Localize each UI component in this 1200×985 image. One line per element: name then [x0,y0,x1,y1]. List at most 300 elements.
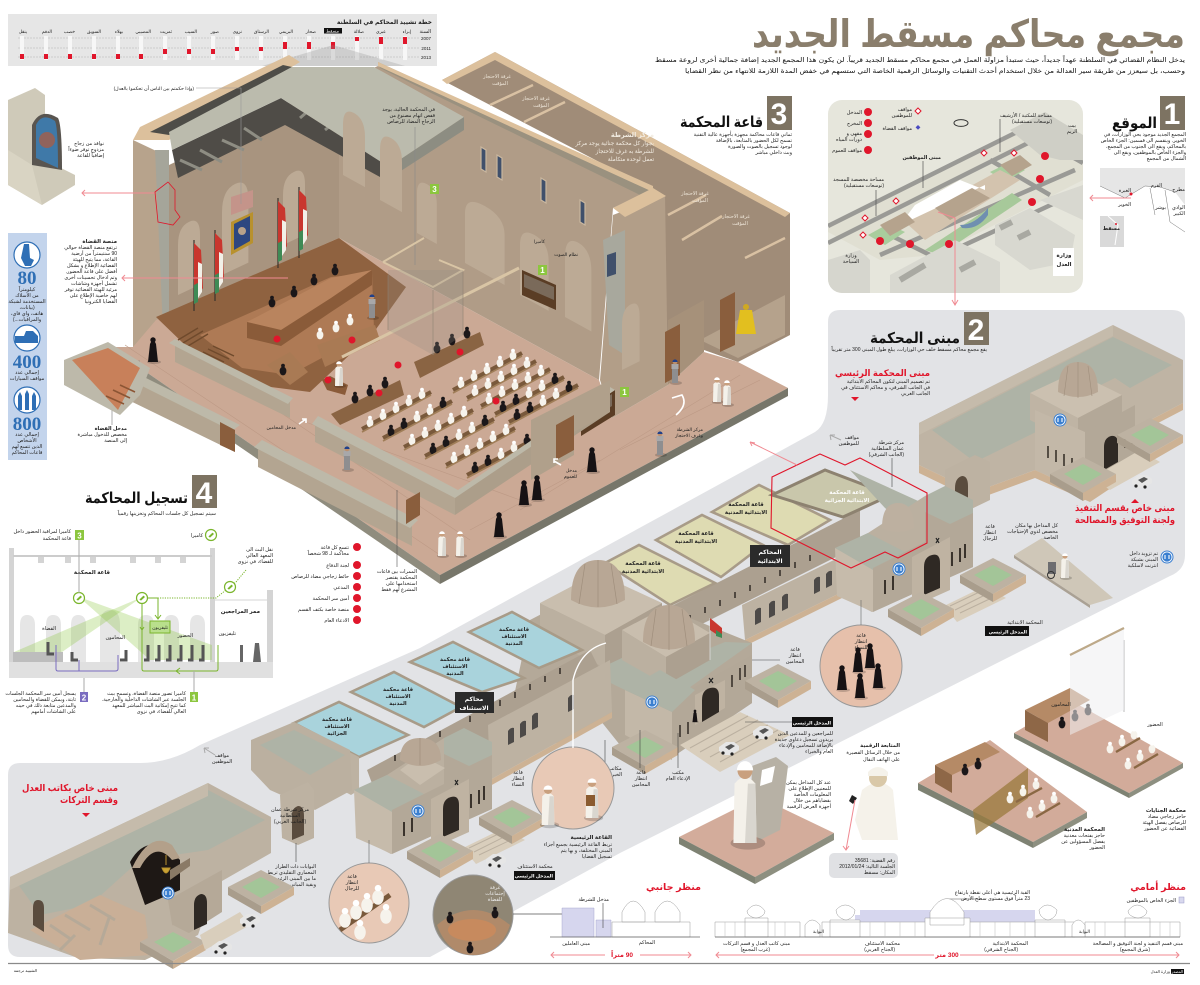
chart: courts construction plan: 2011 [421,46,431,51]
elevation: front view: مبنى كاتب العدل و قسم التركات [723,941,790,947]
label: parking and police: مركز شرطة [878,440,904,446]
arrow: map to building [938,212,958,305]
section 1: location: والجزء الخاص بالموظفين، ويقع الى [1114,150,1187,156]
section 3: courtroom heading: قاعة المحكمة [680,114,763,131]
flags [194,187,308,311]
side block [294,723,359,795]
panel: aerial site map: للموظفين [892,113,912,119]
panel: sidebar statistics [8,233,47,460]
chart: courts construction plan: السيب [185,29,197,34]
east block labels: للرجال [983,536,998,542]
dark tag: primary courts [750,545,790,567]
panel: sidebar statistics: والمراقبات...) [13,317,42,323]
label: main entrance: مكاتب [608,766,622,772]
tower [1030,372,1122,418]
labels: appeals block: محكمة الاستئناف [517,864,553,870]
legend: numbered courtroom elements: منصة خاصة بكتف القسم [298,607,349,613]
panel: sidebar statistics: 400 [13,352,41,373]
diagram: trial recording section [5,529,273,715]
seated figures [48,642,203,660]
callout: judges bench: القاعة، مما يتيح للهيئة [73,257,117,263]
red highlight [771,454,927,568]
appeals wing: الجزائية [327,731,347,737]
outer wall [133,140,169,347]
panel: aerial site map: السياحة [843,259,859,265]
dark tag: appeal courts: محاكم [465,696,484,703]
circle: women waiting hall [820,600,902,707]
label: main entrance: مكتب [672,770,684,776]
appeals wing: قاعة محكمة [383,687,413,693]
hall roofs [294,612,582,757]
appeals wing: الاستئناف [324,724,350,730]
kiosk note: للمعنيين الإطلاع على [788,786,831,792]
primary court wing: الابتدائية المدنية [622,569,664,575]
inset locator map: الوادي [1172,205,1185,211]
dome base 2 [622,607,710,657]
note: wireless internet [1128,551,1173,569]
panel: aerial site map: مقهى و [846,131,862,137]
judges entrance stairs [64,342,150,415]
chart: courts construction plan: المضيبي [135,29,151,34]
red number markers [274,336,500,404]
callout: judges bench: وتم ادخال تحسينات أخرى [64,274,118,281]
elevation: front view: منظر أمامي [1130,880,1186,893]
sms info card: رقم القضية: 35681 [855,858,896,864]
inset locator map: الغبرة [1119,188,1131,194]
outer wall [919,325,1183,495]
courtroom cutaway [110,55,788,584]
labels: appeals block: النساء [512,782,524,788]
trial vignette: criminal court: الحضور [1146,722,1163,728]
section 1: location: المجمع الجديد موجود بحي الوزارات، في [1104,132,1186,138]
inset locator map: بوشر [1154,205,1166,211]
elevation: front view: مبنى قسم التنفيذ و لجنة التوفيق و المصالحة [1093,941,1183,947]
label: main entrance: قاعة [636,770,646,776]
colonnade [742,558,842,640]
steps and ponds [680,712,790,772]
labels: appeals block: السلطانية [280,813,300,819]
callout: judges bench: تشمل أجهزة وشاشات [71,280,118,287]
callout: corridors: المشرع لهم فقط [381,587,417,593]
callout: corridors [377,490,417,593]
panel: aerial site map: (توسعات مستقبلية) [1012,119,1052,125]
holding rooms behind the courtroom: غرفة الاحتجاز [721,214,750,220]
elevation: front view [715,880,1186,959]
panel: aerial site map: مواقف للعموم [832,148,862,154]
dome base [540,573,662,635]
right interior wall [285,66,653,380]
elevation: side view: المحاكم [639,940,655,946]
holding rooms behind the courtroom: المؤقت [492,81,508,87]
gate [280,782,314,845]
dome [400,755,445,785]
panel: sidebar statistics: من الأسلاك [15,292,39,299]
dark tag: appeal courts [455,692,494,713]
label: main entrance: الإدعاء العام [666,776,690,782]
tag 1: كما تتيح إمكانية البث المباشر للمعهد [112,703,187,709]
east block labels: ولجنة التوفيق والمصالحة [1075,515,1175,526]
label: main entrance: الخبراء [608,772,622,778]
labels: appeals block: مركز شرطة عمان [271,807,309,813]
callout: corridors: الممرات بين قاعات [377,569,417,575]
labels: appeals block: مواقف [215,753,229,759]
labels: appeals block: المعماري التقليدي تربط [267,870,316,876]
legend: numbered courtroom elements: محاكمة لـ 98 شخصاً [307,549,349,557]
hall roofs [605,470,891,605]
primary court wing: قاعة المحكمة [728,501,764,508]
chart: courts construction plan: إبراء [403,29,411,35]
label: main entrance: انتظار [788,653,801,659]
callout: window detail [8,88,180,225]
holding rooms behind the courtroom: المؤقت [732,221,748,227]
section 4: trial recording heading: 4 [196,477,213,510]
man with phone: من خلال الرسائل القصيرة [846,750,900,756]
east block labels: انتظار [983,530,996,536]
callout: judges bench: مرئية للهيئة القضائية توفر [64,287,117,293]
panel: sidebar statistics: الذين تتسع لهم [12,444,42,450]
criminal hall label: قاعة المحكمة [829,489,865,496]
police center note: للشرطة به غرف للاحتجاز [595,149,654,155]
chart: courts construction plan: مسقط [326,29,340,34]
section 1: location: بالمحاكم، ويقع الى الجنوب من المجمع، [1106,144,1186,150]
entrance faces [1035,410,1085,492]
legend: numbered courtroom elements: حائط زجاجي مضاد للرصاص [291,574,349,580]
people on the floor [147,294,734,558]
diagram: trial recording section: ممر المراجعين [221,609,260,615]
chart: courts construction plan: صور [210,29,219,34]
dark tag: appeal courts: الاستئناف [460,705,488,712]
label: main entrance: العام والخبراء [805,749,833,755]
criminal hall label [825,489,869,504]
accessibility ramp: الخاصة [1043,535,1058,541]
diagram: trial recording section: الحضور [177,633,193,639]
trial vignette: criminal court: محكمة الجنايات [1146,807,1186,814]
section 3: courtroom heading: لوجود تسجيل بالصوت والصورة [728,144,792,150]
section 2: court building heading: تم تصميم المبنى لتكون المحاكم الابتدائية [847,379,931,385]
circle: women waiting hall: انتظار [854,639,867,645]
diagram: trial recording section: كاميرا [191,533,204,539]
legend: numbered courtroom elements: المدعي [333,585,349,591]
primary court wing: الابتدائية المدنية [675,539,717,545]
kiosk note: المعلومات الخاصة [794,792,831,798]
entrance wall [625,655,752,758]
elevation: front view: البوابة [813,929,824,934]
east block labels [983,499,1175,542]
kiosk note: أجهزة العرض الرقمية [787,803,832,810]
trial vignette: civil court: المحكمة المدنية [1064,826,1105,833]
legend: numbered courtroom elements: تتسع كل قاعة [320,545,350,551]
panel: aerial site map: مواقف القضاة [882,126,912,132]
portrait [231,190,253,255]
circle: main hall: تسجيل القضايا [582,854,613,860]
police center note: تعمل لوحدة متكاملة [608,156,654,163]
labels: appeals block: انتظار [511,776,524,782]
section 3: courtroom heading [680,96,793,156]
panel: aerial site map: وزارة [1057,253,1072,259]
section 3: courtroom heading: ثماني قاعات محاكمة مجهزة بأجهزة عالية التقنية [694,130,793,138]
callout: judges entrance: مخصص للدخول مباشرة [77,432,127,438]
panel: aerial site map: (توسعات مستقبلية) [844,183,884,189]
intro text: يدخل النظام القضائي في السلطنة عهداً جديداً، حيث ستبدأ مزاولة العمل في مجمع محاكم مسقط الجديد قريباً. لن يكون هذا المجمع الجديد إضافة جمالية أخرى لروعة مسقط [655,55,1185,64]
section 2: court building heading: مبنى المحكمة الرئيسي [835,368,930,379]
legend: numbered courtroom elements: لجنة الدفاع [326,563,349,569]
section 1: location: الموقع [1112,115,1157,132]
diagram: trial recording section: القضاة [42,626,56,632]
elevation: side view: مبنى العاملين [562,941,590,947]
elevation: front view: البوابة [1079,929,1090,934]
diagram: trial recording section: للقضاء، في نزوى [238,559,273,565]
appeals wing: الاستئناف [501,634,527,640]
label: parking and police: مواقف [845,435,859,441]
dome [1058,362,1098,397]
holding rooms behind the courtroom: غرفة الاحتجاز [521,96,550,102]
diagram: trial recording section: تليفزيون [152,625,169,630]
circle: men waiting hall: انتظار [345,880,358,886]
west block heading: مبنى خاص بكاتب العدل [22,783,118,794]
circle: men waiting hall: قاعة [347,874,357,880]
panel: aerial site map: مبنى الموظفين [902,155,941,161]
holding room labels: غرفة الاحتجاز [482,74,511,80]
labels: appeals block: (الجانب الغربي) [274,819,306,825]
section 2: court building heading [831,312,989,401]
sms info card [829,853,898,878]
chart: courts construction plan: السويق [87,29,101,34]
appeals wing: الاستئناف [442,664,468,670]
intro text: وحسب، بل سيعزز من طريقة سير العدالة من خلال استخدام أحدث التقنيات والوسائل الرقمية الخاصة التي ستسهم في خفض المدة اللازمة للانتهاء من نظر القضايا [685,66,1185,75]
label: main entrance: المدخل الرئيسي [793,720,831,726]
building section [9,662,273,678]
section 3: courtroom heading: 3 [771,98,787,131]
chart: courts construction plan: 2013 [421,55,431,60]
kiosk note: عند كل المداخل يمكن [786,780,831,786]
labels: appeals block: ما بين المبنى الرئيسي [271,876,316,882]
section 3: courtroom heading: وبث داخلي مباشر [754,150,793,156]
circle: main hall [532,643,614,860]
callout: justice verse [114,85,241,204]
callout: judges entrance: مدخل القضاة [95,426,127,432]
appeals wing [251,612,612,878]
trial vignette: civil court: الحضور [1089,845,1105,851]
map labels: بيت [1068,123,1076,129]
circle: judges meeting room: غرفة [490,885,501,891]
label: primary main entrance [985,620,1043,636]
panel: aerial site map: الريم [1067,129,1077,135]
courtroom cutaway: مدخل [566,468,578,473]
callout: window detail: مزدوج توفر ضوءاً [68,145,104,153]
roof [932,337,1172,462]
tag 2: 2 [82,694,87,702]
man with phone: على الهاتف النقال [863,757,900,763]
primary court wing: الابتدائية المدنية [725,510,767,516]
dome 2 [643,605,695,650]
chart: courts construction plan: بهلاء [115,29,123,34]
panel: sidebar statistics: إجمالي عدد [15,370,40,376]
label: main entrance: انتظار [634,776,647,782]
icon: network cable [14,242,40,268]
broadcast note: نقل البث الى [246,547,273,553]
labels: appeals block: البوابات ذات الطراز [274,864,316,870]
trial vignette: criminal court: المحامون [1051,702,1071,708]
ceiling structure [172,98,389,178]
trial vignette: criminal court: حاجز زجاجي مضاد [1148,814,1186,820]
section 1: location: الشمال من المجمع [1147,156,1186,162]
panel: aerial site map: مساحة للمكتبة / الأرشيف [1000,112,1052,119]
inset locator map [1090,168,1185,247]
green tags [430,184,629,397]
tag 1: كاميرا تصور منصة القضاة، وتسمح ببث [107,691,187,697]
chart: courts construction plan [8,14,437,66]
front elevation outline [715,898,1180,937]
courtroom cutaway: مركز الشرطة [677,427,704,432]
rear wall behind the bench [169,110,339,312]
white arrows [299,395,684,465]
section 3: courtroom heading: تسمح لكل الحضور بالمتابعة، بالإضافة [716,138,793,144]
section 2: court building heading: في الجانب الشرقي، و محاكم الاستئناف في [841,385,931,391]
accessibility ramp: مخصص لذوي الإحتياجات [1007,529,1058,535]
panel: aerial site map: مواقف [898,107,912,113]
labels: appeals block: المدخل الرئيسي [515,874,553,880]
inset locator map: الكبير [1173,211,1185,217]
circle: main hall: القاعة الرئيسية [571,835,612,841]
labels: appeals block: قاعة [513,770,523,776]
label: parking and police [830,435,904,487]
footer rule and credits: المصدر [1170,970,1183,974]
panel: aerial site map: المدخل [847,110,862,116]
legend: numbered courtroom elements: أمين سر المحكمة [313,595,350,602]
appeals wing: قاعة محكمة [440,657,470,663]
accessibility ramp: كل المداخل بها مكان [1015,523,1059,529]
panel: sidebar statistics: قاعات المحاكم [12,450,43,456]
panel: aerial site map [828,100,1083,305]
west block [8,783,294,969]
appeals wing: قاعة محكمة [322,717,352,723]
footer rule and credits: ترجمة [14,968,24,973]
legend: numbered courtroom elements: الادعاء العام [324,618,349,624]
inset locator map: الخوير [1117,202,1131,208]
tag 1: 1 [192,694,197,702]
chart: courts construction plan: ينقل [19,29,28,34]
footer rule and credits [8,964,1190,974]
tag 3: كاميرا لمراقبة الحضور داخل [13,529,72,535]
sms info card: الجلسة التالية: 2012/01/24 [839,864,895,870]
callout: window detail: نوافذ من زجاج [74,141,104,147]
section 1: location: 1 [1164,98,1180,131]
dome 1 [571,560,625,608]
wall arches [178,107,591,332]
panel: sidebar statistics: مواقف السيارات [10,376,45,382]
circle: women waiting hall: للنساء [854,645,868,651]
label: main entrance: المحامين [786,659,804,665]
callout: judges bench: منصة القضاة [82,239,117,245]
roof beam note: في المحكمة الحالية، يوجد [382,107,436,113]
elevation: front view: القبة الرئيسية هي أعلى نقطة بارتفاع [955,889,1030,896]
chart: courts construction plan: صلالة [354,29,364,34]
labels: appeals block: وبقية المباني [290,882,317,888]
chart: courts construction plan: البريمي [279,29,293,34]
callout: judges bench: 90 سنتيمتراً من أرضية [71,249,117,257]
label: main entrance: للمراجعين و للمدعين الذين [778,731,833,737]
tag 1: العالي للقضاء، في نزوى [137,709,186,715]
man with phone: المتابعة الرقمية [860,743,900,749]
callout: window detail: إضافياً للقاعة [77,151,105,159]
chart: courts construction plan: 2007 [421,36,431,41]
holding rooms behind the courtroom: غرفة الاحتجاز [680,191,709,197]
trial vignette: civil court: يفصل المسؤولين عن [1061,839,1106,845]
diagram: trial recording section: تليفزيون [218,631,237,637]
heading: construction plan: خطة تشييد المحاكم في السلطنة [337,19,432,26]
icon: pickup car [14,325,40,351]
labels: appeals block [204,748,555,888]
tag 3 [13,529,84,593]
primary hall labels: قاعة المحكمة [625,560,661,567]
digital kiosk [679,757,834,884]
panel: sidebar statistics: 800 [13,414,41,435]
elevation: front view: (شرق المجمع) [1120,947,1150,953]
translucent dome [882,503,914,532]
panel: building background [8,310,1185,957]
callout: judges bench: ترتفع منصة القضاة حوالي [64,245,118,251]
label: primary main entrance: المدخل الرئيسي [989,630,1027,636]
wing wall [367,650,600,805]
wing wall [660,510,860,645]
accessibility ramp [1007,523,1113,608]
circle: judges meeting room: إجتماعات [485,891,505,897]
callout: judges entrance: إلى المنصة [104,438,128,444]
appeals wing: الاستئناف [385,694,411,700]
courtroom cutaway: قفص اتهام مصنوع من [390,113,436,119]
callout: judges entrance [77,361,140,444]
chart: courts construction plan: خصب [64,29,75,34]
trial vignette: criminal court: القضائية عن الحضور [1143,826,1186,832]
courtroom labels: قاعة المحكمة [74,569,110,576]
map legend [864,108,872,116]
icon: three people [14,387,40,413]
trial vignette: criminal court: للرصاص يفصل الهيئة [1142,820,1186,826]
panel: sidebar statistics: (بيانات، [19,305,35,311]
panel: sidebar statistics: هاتف، واي فاي، [11,311,44,317]
arrow: to inset [1090,195,1131,201]
trial vignette: civil court: حاجز بفتحات معدنية [1064,833,1105,839]
elevation: side view: مدخل للشرطة [578,897,609,903]
label: primary main entrance: المحكمة الابتدائية [1007,620,1043,626]
elevation: front view: (غرب المجمع) [741,947,770,953]
courtroom small labels: كاميرا [534,239,546,244]
section 2: court building heading: مبنى المحكمة [870,330,960,347]
callout: judges bench [64,239,288,305]
flag [709,618,711,660]
panel: aerial site map: المخرج [847,121,862,127]
elevation: front view: الجزء الخاص بالموظفين [1127,898,1176,904]
footer rule and credits: الشبيبة [25,968,37,973]
tag 2: على الشاشات أمامهم [31,708,76,715]
inset locator map: القرم [1151,183,1162,189]
label: parking and police: (الجانب الشرقي) [869,452,904,458]
section 4: trial recording heading: تسجيل المحاكمة [85,490,188,507]
west block: وقسم التركات [60,795,118,806]
section 1: location [1101,96,1187,162]
diagram: trial recording section: المعهد العالي [246,553,273,559]
kiosk note [786,780,832,810]
legend: numbered courtroom elements [291,543,361,624]
section 2: court building heading: الجانب الغربي [901,391,930,397]
diagram: trial recording section: المحامون [106,635,125,641]
note: wireless internet: انترنت لاسلكية [1128,563,1158,569]
legend: camera [206,530,216,540]
panel: sidebar statistics: 80 [18,268,36,289]
circle: main hall: تربط القاعة الرئيسية بجميع أجزاء [544,841,613,848]
side roof [590,642,752,700]
tag 3: 3 [77,532,82,540]
